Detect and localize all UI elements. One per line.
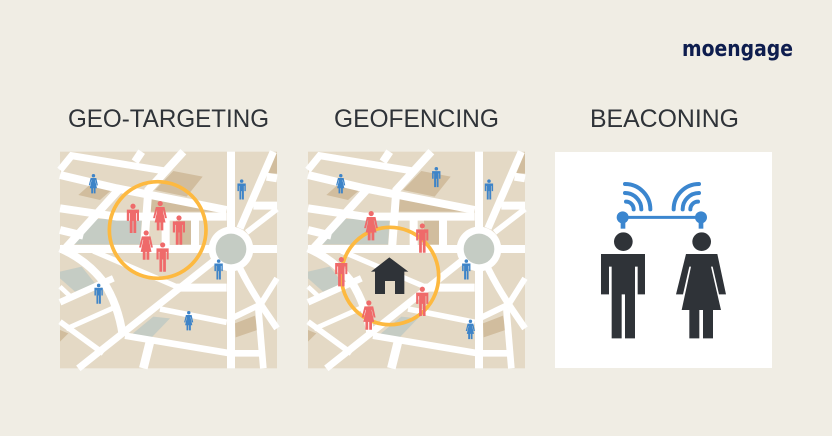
geofence circle: [341, 227, 439, 325]
red people on the fence: [335, 211, 428, 330]
red people inside the radius: [127, 201, 185, 272]
icon: wifi signal right: [674, 184, 699, 209]
blue people outside the radius: [89, 174, 246, 330]
icon: wifi signal left: [625, 184, 650, 209]
targeting radius circle: [109, 182, 206, 278]
heading: beaconing: BEACONING: [590, 105, 739, 133]
beacon link with nodes: [617, 211, 707, 229]
heading: geofencing: GEOFENCING: [334, 105, 499, 133]
panel: geofencing map: [308, 152, 525, 368]
panel: beaconing: [555, 152, 772, 368]
panel: geo-targeting map: [60, 152, 277, 368]
icon: left person: [601, 232, 645, 338]
icon: house: [371, 257, 408, 294]
blue people outside the fence: [336, 167, 493, 339]
icon: right person: [676, 232, 726, 338]
logo: moengage: moengage: [682, 37, 793, 62]
heading: geo-targeting: GEO-TARGETING: [68, 105, 269, 133]
